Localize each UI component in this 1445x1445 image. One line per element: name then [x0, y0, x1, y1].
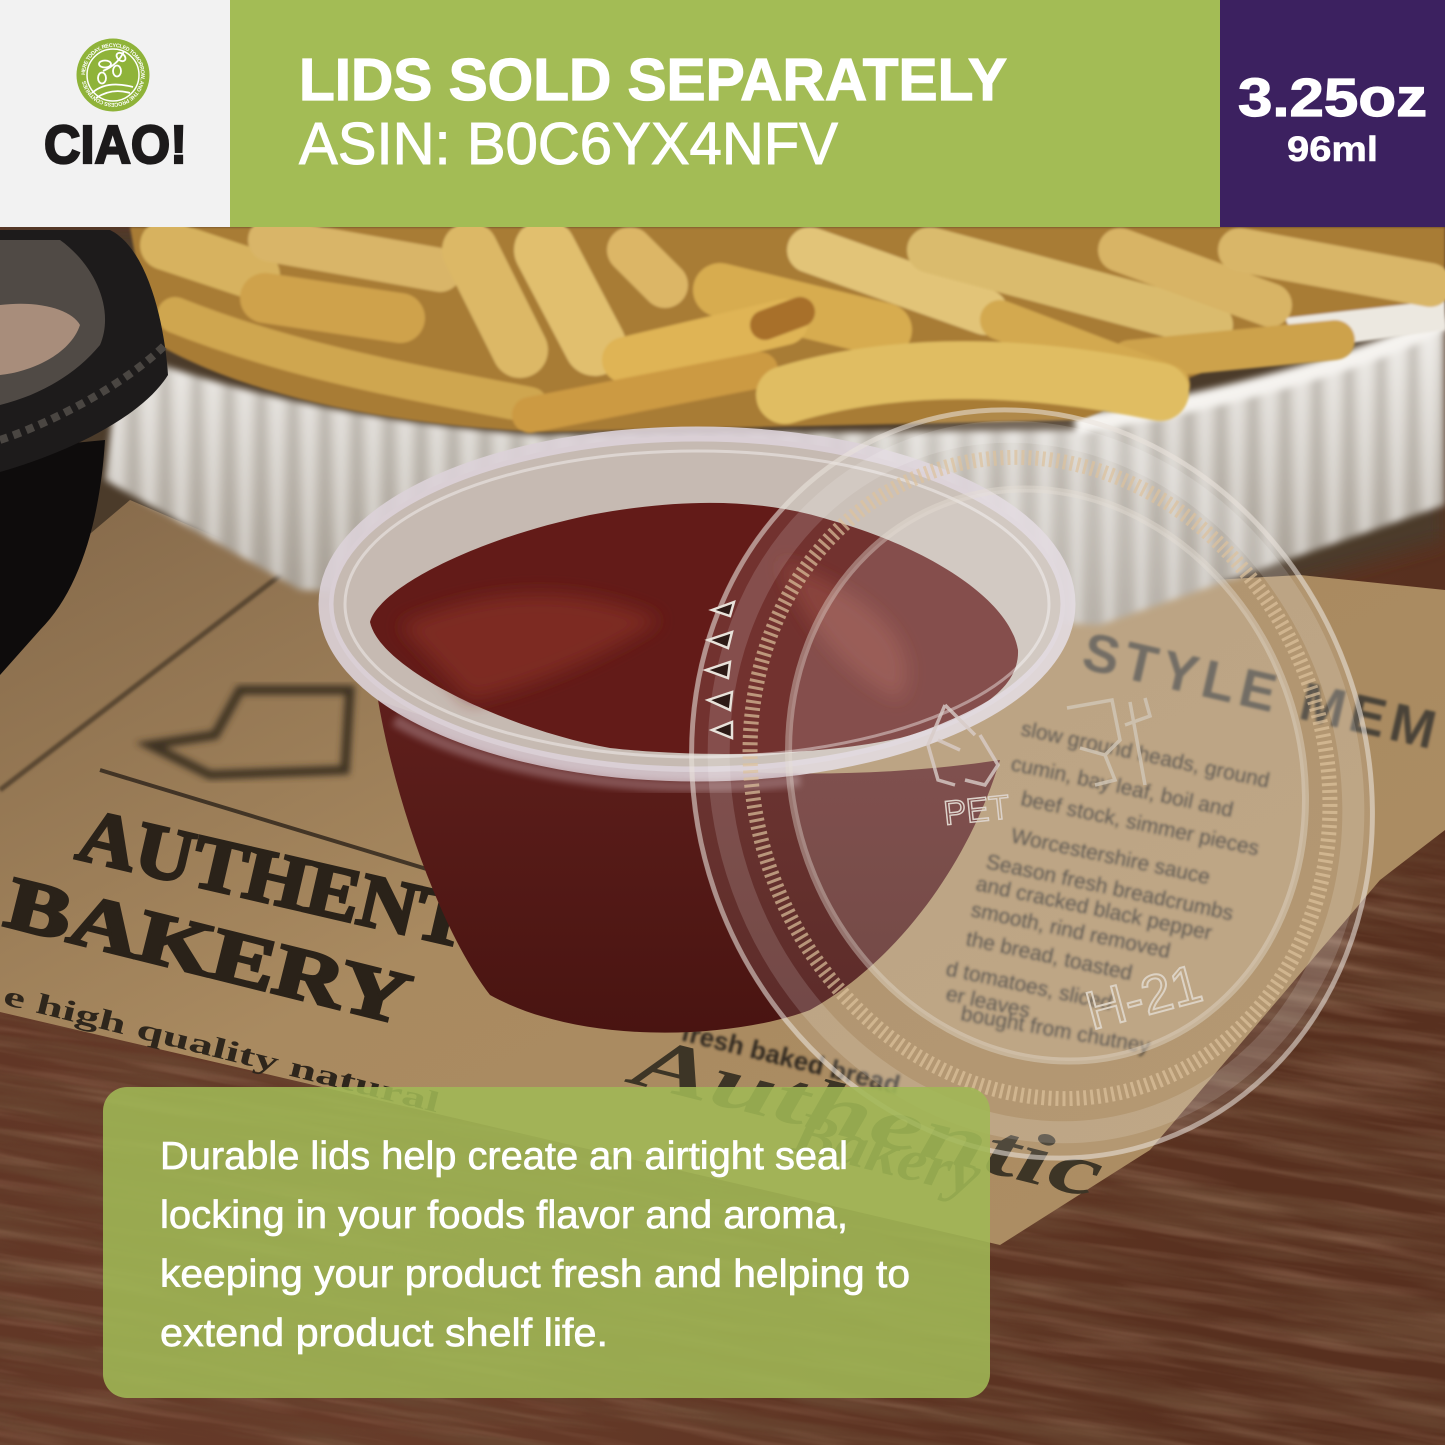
- size in millilitres: 96ml: [1287, 130, 1378, 169]
- callout text: keeping your product fresh and helping to: [160, 1253, 910, 1296]
- clear portion cup with sauce: [326, 434, 1068, 1033]
- black condiment cup: [0, 230, 168, 675]
- title panel: [230, 0, 1220, 227]
- paper print: menu text: the bread, toasted: [964, 927, 1134, 985]
- paper print: menu text: slow ground heads, ground: [1019, 717, 1272, 793]
- cup body: [378, 700, 1000, 1033]
- embossed recycling symbol: [928, 705, 998, 785]
- paper print: menu text: and cracked black pepper: [974, 872, 1214, 945]
- lid outer disc: [690, 412, 1370, 1160]
- callout text: [160, 1135, 910, 1355]
- paper print: tagline: e high quality natural: [0, 980, 443, 1119]
- logo badge: HERE TODAY, RECYCLED TOMORROW, AND THE PROCESS CONTINUES: [81, 43, 145, 107]
- title line: ASIN: ASIN: B0C6YX4NFV: [299, 111, 839, 177]
- logo panel: [0, 0, 230, 227]
- embossed text: PET: PET: [942, 788, 1012, 833]
- paper print: BAKERY: BAKERY: [0, 862, 418, 1041]
- paper print: menu text: bought from chutney: [959, 1002, 1152, 1058]
- paper print: menu text: beef stock, simmer pieces: [1019, 787, 1261, 860]
- callout: airtight seal description: [103, 1087, 990, 1398]
- embossed food-safe icon: [1067, 698, 1150, 785]
- kraft paper placemat: [0, 500, 1445, 1245]
- paper print: menu text: cumin, bay leaf, boil and: [1009, 752, 1235, 822]
- clear PET lid: [689, 407, 1375, 1161]
- logo wordmark: CIAO!: [44, 115, 187, 175]
- size in ounces: 3.25oz: [1238, 68, 1427, 128]
- paper print: script lettering 2: Bakery: [786, 1098, 988, 1209]
- cup interior: [329, 436, 1065, 772]
- paper print: menu text: Season fresh breadcrumbs: [984, 850, 1235, 925]
- callout text: extend product shelf life.: [160, 1312, 608, 1355]
- paper print: script lettering: Authentic: [620, 1018, 1111, 1216]
- paper print: menu text: d tomatoes, sliced: [944, 957, 1114, 1015]
- lid mid ring: [708, 420, 1364, 1144]
- paper print: menu text: [679, 717, 1272, 1100]
- background behind plate: [4, 227, 1444, 578]
- lid inner panel: [785, 486, 1309, 1064]
- callout text: locking in your foods flavor and aroma,: [160, 1194, 848, 1237]
- white ribbed plate: [105, 320, 1445, 625]
- title line: lids sold separately: LIDS SOLD SEPARATELY: [299, 47, 1007, 113]
- lid outer edge: [689, 407, 1375, 1161]
- paper print: menu text: fresh baked bread: [679, 1017, 903, 1100]
- size panel: [1220, 0, 1445, 227]
- paper print: menu text: er leaves: [944, 982, 1032, 1023]
- paper print: AUTHENTIC: AUTHENT: [70, 793, 479, 965]
- cup rim: [326, 434, 1068, 774]
- paper print: menu text: Worcestershire sauce: [1009, 824, 1212, 889]
- lid serrated ridge: [742, 450, 1338, 1106]
- paper print: STYLE heading: STYLE MEM: [1077, 621, 1442, 761]
- header bar: [0, 0, 1445, 227]
- sauce surface: [370, 503, 1018, 754]
- embossed text: H-21: H-21: [1080, 953, 1208, 1042]
- callout text: Durable lids help create an airtight seal: [160, 1135, 848, 1178]
- french fries: [130, 227, 1445, 432]
- paper print: menu text: smooth, rind removed: [969, 898, 1172, 963]
- lid rim bumps: [706, 602, 734, 738]
